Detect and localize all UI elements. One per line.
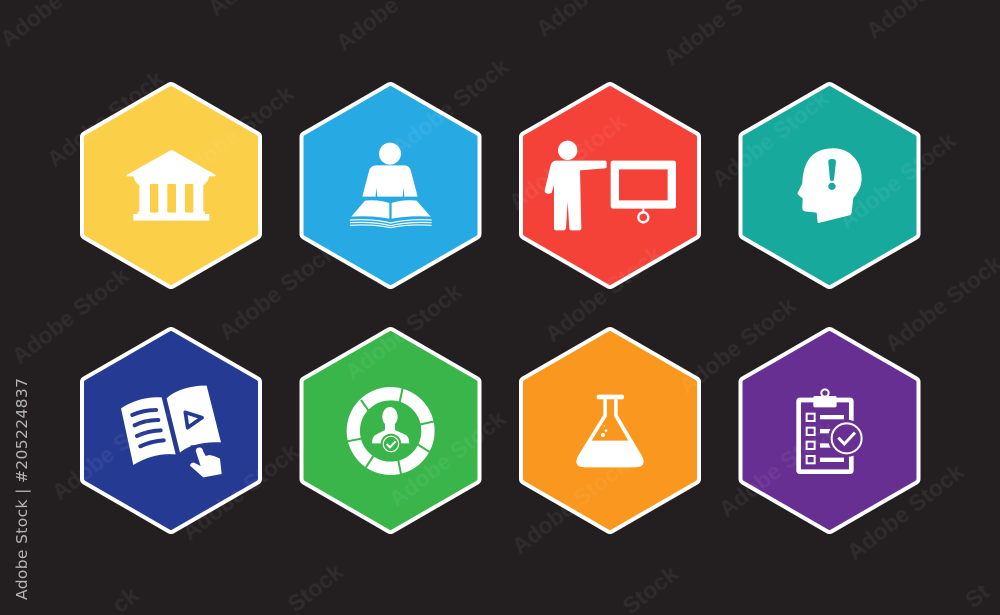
- watermark: repeated Adobe Stock text: Adobe Stock: [384, 405, 511, 512]
- watermark: repeated Adobe Stock text: Adobe Stock: [674, 292, 801, 399]
- credit: vertical stock id: Adobe Stock | #205224837: [13, 378, 31, 600]
- icon: laboratory flask: [576, 395, 644, 467]
- panel: green hexagon with ring and person icon: [306, 333, 476, 528]
- watermark: repeated Adobe Stock text: Adobe Stock: [707, 85, 834, 192]
- panel: teal hexagon with head icon: [744, 88, 914, 283]
- watermark: repeated Adobe Stock text: St: [960, 578, 994, 613]
- watermark: repeated Adobe Stock text: Adobe Stock: [714, 415, 841, 522]
- icon: open book with play button and pointing hand: [121, 386, 227, 480]
- panel: blue hexagon with reader icon: [306, 88, 476, 283]
- panel: orange hexagon with flask icon: [525, 333, 695, 528]
- icon: clipboard checklist: [799, 389, 865, 472]
- watermark: repeated Adobe Stock text: Adobe Stock: [47, 398, 174, 505]
- panel: purple hexagon with checklist icon: [744, 333, 914, 528]
- panel: red hexagon with presenter icon: [525, 88, 695, 283]
- watermark: repeated Adobe Stock text: Adobe Stock: [842, 458, 969, 565]
- icon: presenter at screen: [545, 141, 676, 230]
- watermark: repeated Adobe Stock text: Adobe Stock: [7, 262, 134, 369]
- watermark: repeated Adobe Stock text: Adobe Stock: [42, 65, 169, 172]
- watermark: repeated Adobe Stock text: Adobe Stock: [214, 238, 341, 345]
- panel: navy hexagon with interactive book icon: [86, 333, 256, 528]
- watermark: repeated Adobe Stock text: Adobe Stock: [540, 240, 667, 347]
- panel: yellow hexagon with bank icon: [86, 88, 256, 283]
- icon: bank building: [127, 150, 216, 221]
- watermark: repeated Adobe Stock text: Adobe Stock: [172, 80, 299, 187]
- watermark: repeated Adobe Stock text: Adobe Stock: [507, 452, 634, 559]
- icon: head with exclamation mark: [798, 148, 862, 223]
- watermark: repeated Adobe Stock text: Adobe Stock: [504, 108, 631, 215]
- watermark: repeated Adobe Stock text: Adobe Stock: [834, 127, 961, 234]
- icon: person reading a book: [350, 143, 432, 228]
- watermark: repeated Adobe Stock text: Adobe Stock: [177, 438, 304, 545]
- icon: segmented ring with verified person: [347, 388, 435, 474]
- watermark: repeated Adobe Stock text: Adobe Stock: [387, 53, 514, 160]
- watermark: repeated Adobe Stock text: Adobe Stock: [340, 278, 467, 385]
